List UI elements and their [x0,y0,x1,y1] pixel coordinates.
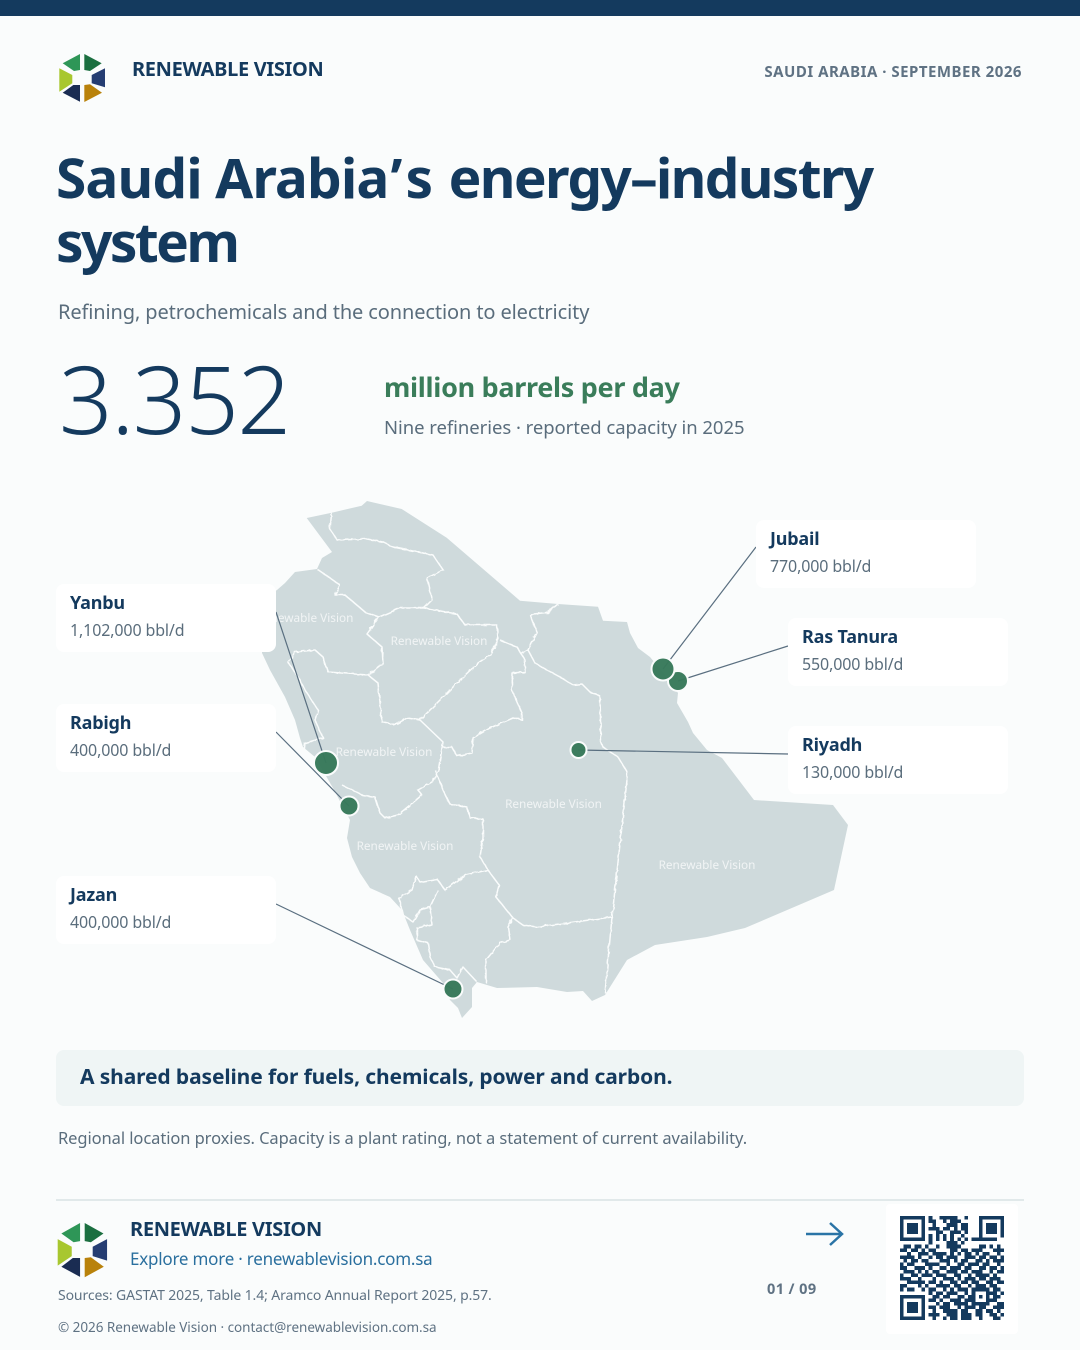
callout: Ras Tanura [788,618,1008,686]
callout: Riyadh [788,726,1008,794]
footer brand name: RENEWABLE VISION [130,1215,322,1242]
map: country shape [262,501,848,1018]
top bar [0,0,1080,16]
title: Saudi Arabia’s energy–industry [56,140,872,215]
sources: Sources: GASTAT 2025, Table 1.4; Aramco Annual Report 2025, p.57. [58,1286,492,1305]
callout: Jazan: Jazan [70,883,117,907]
callout: Jubail: 770,000 bbl/d [770,555,871,577]
map: watermark labels: Renewable Vision [357,838,453,854]
page number: 01 / 09 [767,1279,817,1299]
footer link: Explore more · renewablevision.com.sa [130,1247,432,1270]
callout: Rabigh: Rabigh [70,711,131,735]
callout: Yanbu: 1,102,000 bbl/d [70,619,184,641]
map: watermark labels: Renewable Vision [336,744,432,760]
map: watermark labels: Renewable Vision [505,796,602,812]
big number: 3.352 [59,334,290,462]
callout: Jubail: Jubail [770,527,819,551]
callout: Rabigh [56,704,276,772]
callout: Yanbu [56,584,276,652]
callout: Ras Tanura: 550,000 bbl/d [802,653,903,675]
map: watermark labels: Renewable Vision [659,857,755,873]
callout: Ras Tanura: Ras Tanura [802,625,898,649]
callout: Jazan [56,876,276,944]
map: region borders [288,513,627,1011]
callout: Jazan: 400,000 bbl/d [70,911,171,933]
brand name: RENEWABLE VISION [132,55,323,82]
callout: Yanbu: Yanbu [70,591,125,615]
location markers [314,658,688,998]
method note: Regional location proxies. Capacity is a plant rating, not a statement of current availability. [58,1126,747,1149]
icon: logo [59,54,105,102]
title: system [56,204,237,279]
callout: Riyadh: 130,000 bbl/d [802,761,903,783]
map: watermark labels [257,610,755,873]
title [56,140,874,279]
takeaway band: A shared baseline for fuels, chemicals, power and carbon. [80,1063,672,1091]
callout: Rabigh: 400,000 bbl/d [70,739,171,761]
map: watermark labels: Renewable Vision [257,610,353,626]
callout: Riyadh: Riyadh [802,733,862,757]
footer rule [56,1199,1024,1201]
unit description: Nine refineries · reported capacity in 2025 [384,415,745,440]
unit label: million barrels per day [384,368,680,405]
takeaway band [56,1050,1024,1106]
icon: QR code [900,1216,1004,1320]
date tag: SAUDI ARABIA · SEPTEMBER 2026 [764,62,1022,82]
QR card [886,1204,1018,1334]
subtitle: Refining, petrochemicals and the connection to electricity [58,298,589,325]
leader lines [276,547,788,989]
copyright: © 2026 Renewable Vision · contact@renewablevision.com.sa [58,1318,437,1336]
callout: Jubail [756,520,976,588]
map: watermark labels: Renewable Vision [391,633,487,649]
